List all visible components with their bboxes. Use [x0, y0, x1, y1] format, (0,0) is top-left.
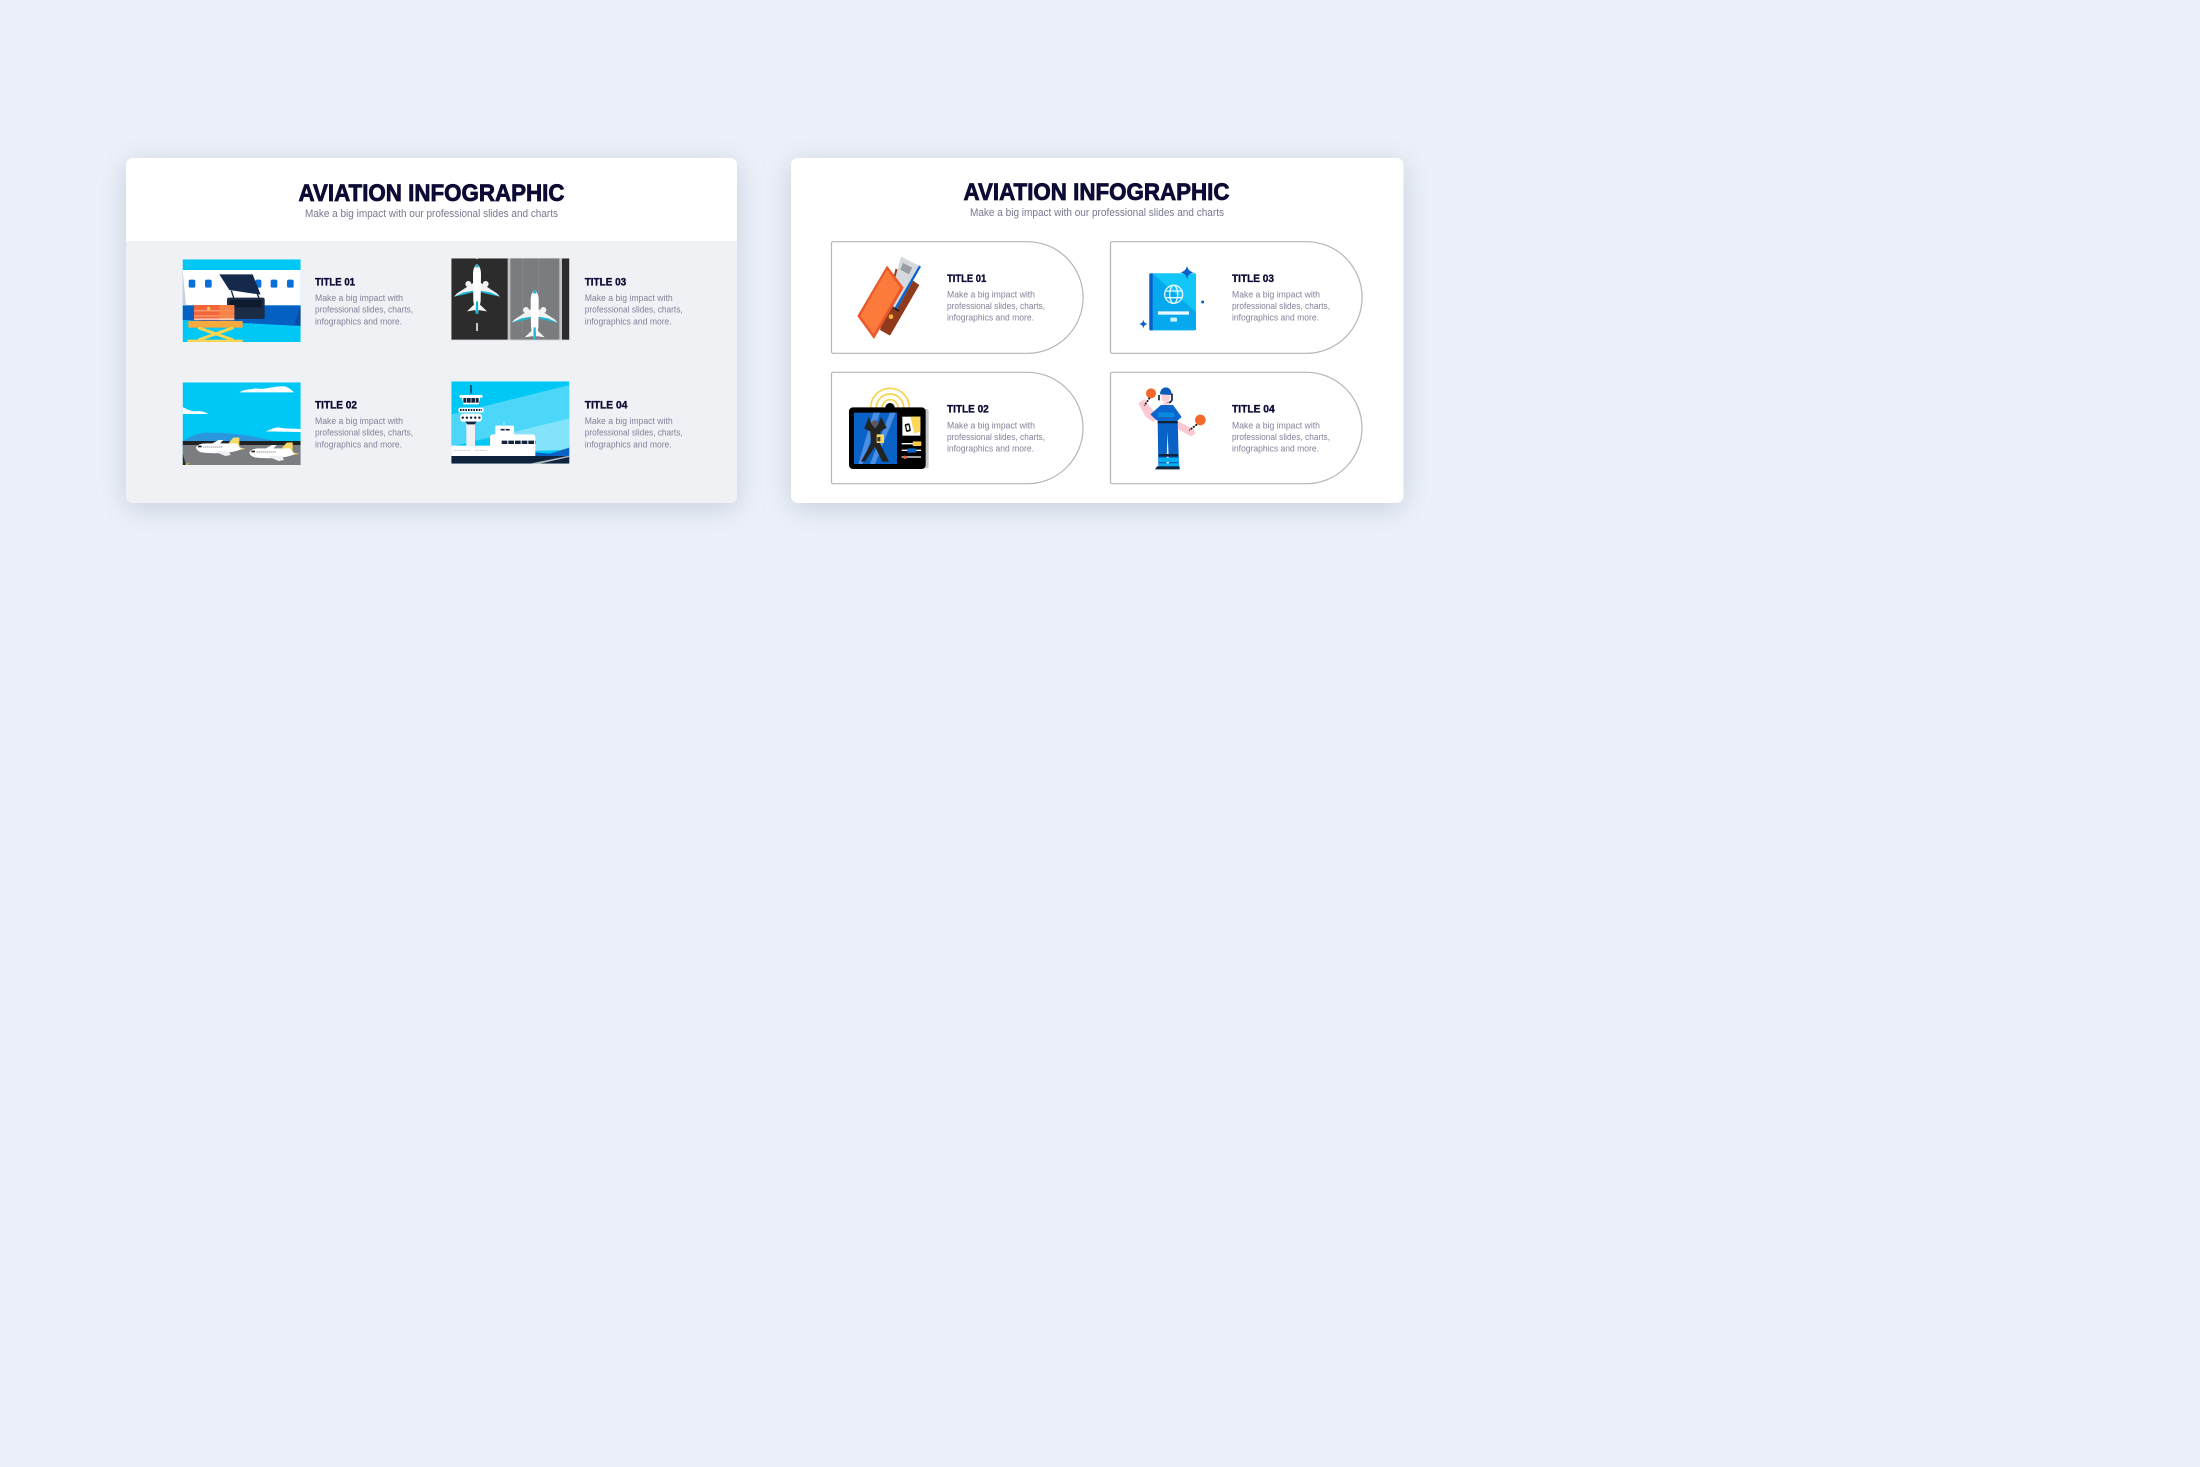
image: cargo loading	[183, 259, 301, 342]
image: runway from above	[451, 258, 569, 341]
text: title 01: Make a big impact with	[315, 293, 403, 303]
card: title 01: Make a big impact with	[947, 289, 1035, 299]
subtitle: Make a big impact with our professional slides and charts	[305, 208, 559, 220]
text: title 02: professional slides, charts,	[315, 428, 413, 438]
card: title 01: professional slides, charts,	[947, 301, 1045, 311]
text: title 04	[585, 400, 683, 449]
capsule outline	[1110, 372, 1362, 484]
text: title 03	[585, 277, 683, 326]
card: title 03: Make a big impact with	[1232, 289, 1320, 299]
text: TITLE 04	[1232, 404, 1276, 416]
card: title 04: Make a big impact with	[1232, 420, 1320, 430]
text: title 04: professional slides, charts,	[585, 428, 683, 438]
image: control tower and terminal	[451, 381, 569, 464]
image: parked planes	[183, 382, 301, 465]
text: title 02: TITLE 02	[315, 400, 357, 412]
text: title 01	[315, 277, 413, 326]
card: title 02: Make a big impact with	[947, 420, 1035, 430]
icon: passport	[1139, 265, 1204, 330]
panel: left slide with photo tiles	[126, 158, 737, 503]
text: title 02: infographics and more.	[315, 439, 402, 449]
capsule outline	[832, 372, 1083, 484]
capsule outline	[1110, 242, 1362, 353]
text: title 03: TITLE 03	[585, 277, 626, 289]
panel background	[126, 158, 737, 503]
card: title 04: professional slides, charts,	[1232, 432, 1330, 442]
title: AVIATION INFOGRAPHIC	[964, 179, 1230, 206]
text: title 02: Make a big impact with	[315, 416, 403, 426]
card: title 03: infographics and more.	[1232, 313, 1319, 323]
card: title 04: infographics and more.	[1232, 444, 1319, 454]
text: TITLE 02	[947, 404, 989, 416]
text: title 03: Make a big impact with	[585, 293, 673, 303]
header band	[126, 158, 737, 241]
card: title 04	[1110, 372, 1362, 484]
text: title 01: professional slides, charts,	[315, 305, 413, 315]
icon: security ID badge	[849, 388, 929, 469]
card: title 02: infographics and more.	[947, 444, 1034, 454]
text: title 02	[315, 400, 413, 449]
card: title 01: infographics and more.	[947, 313, 1034, 323]
text: title 01: infographics and more.	[315, 316, 402, 326]
title: AVIATION INFOGRAPHIC	[298, 180, 564, 207]
card: title 03	[1110, 242, 1362, 353]
panel: right slide with icon capsules	[791, 158, 1404, 503]
text: title 04: Make a big impact with	[585, 416, 673, 426]
capsule outline	[832, 242, 1083, 353]
icon: wallet with boarding pass	[857, 257, 921, 339]
text: TITLE 01	[947, 273, 986, 285]
text: title 04: TITLE 04	[585, 400, 628, 412]
text: title 04: infographics and more.	[585, 439, 672, 449]
text: title 01: TITLE 01	[315, 277, 355, 289]
card: title 01	[832, 242, 1083, 353]
text: title 03: professional slides, charts,	[585, 305, 683, 315]
panel background	[791, 158, 1404, 503]
card: title 02	[832, 372, 1083, 484]
icon: aircraft marshaller	[1138, 387, 1206, 469]
text: TITLE 03	[1232, 273, 1274, 285]
subtitle: Make a big impact with our professional slides and charts	[970, 207, 1225, 219]
text: title 03: infographics and more.	[585, 316, 672, 326]
card: title 02: professional slides, charts,	[947, 432, 1045, 442]
card: title 03: professional slides, charts,	[1232, 301, 1330, 311]
